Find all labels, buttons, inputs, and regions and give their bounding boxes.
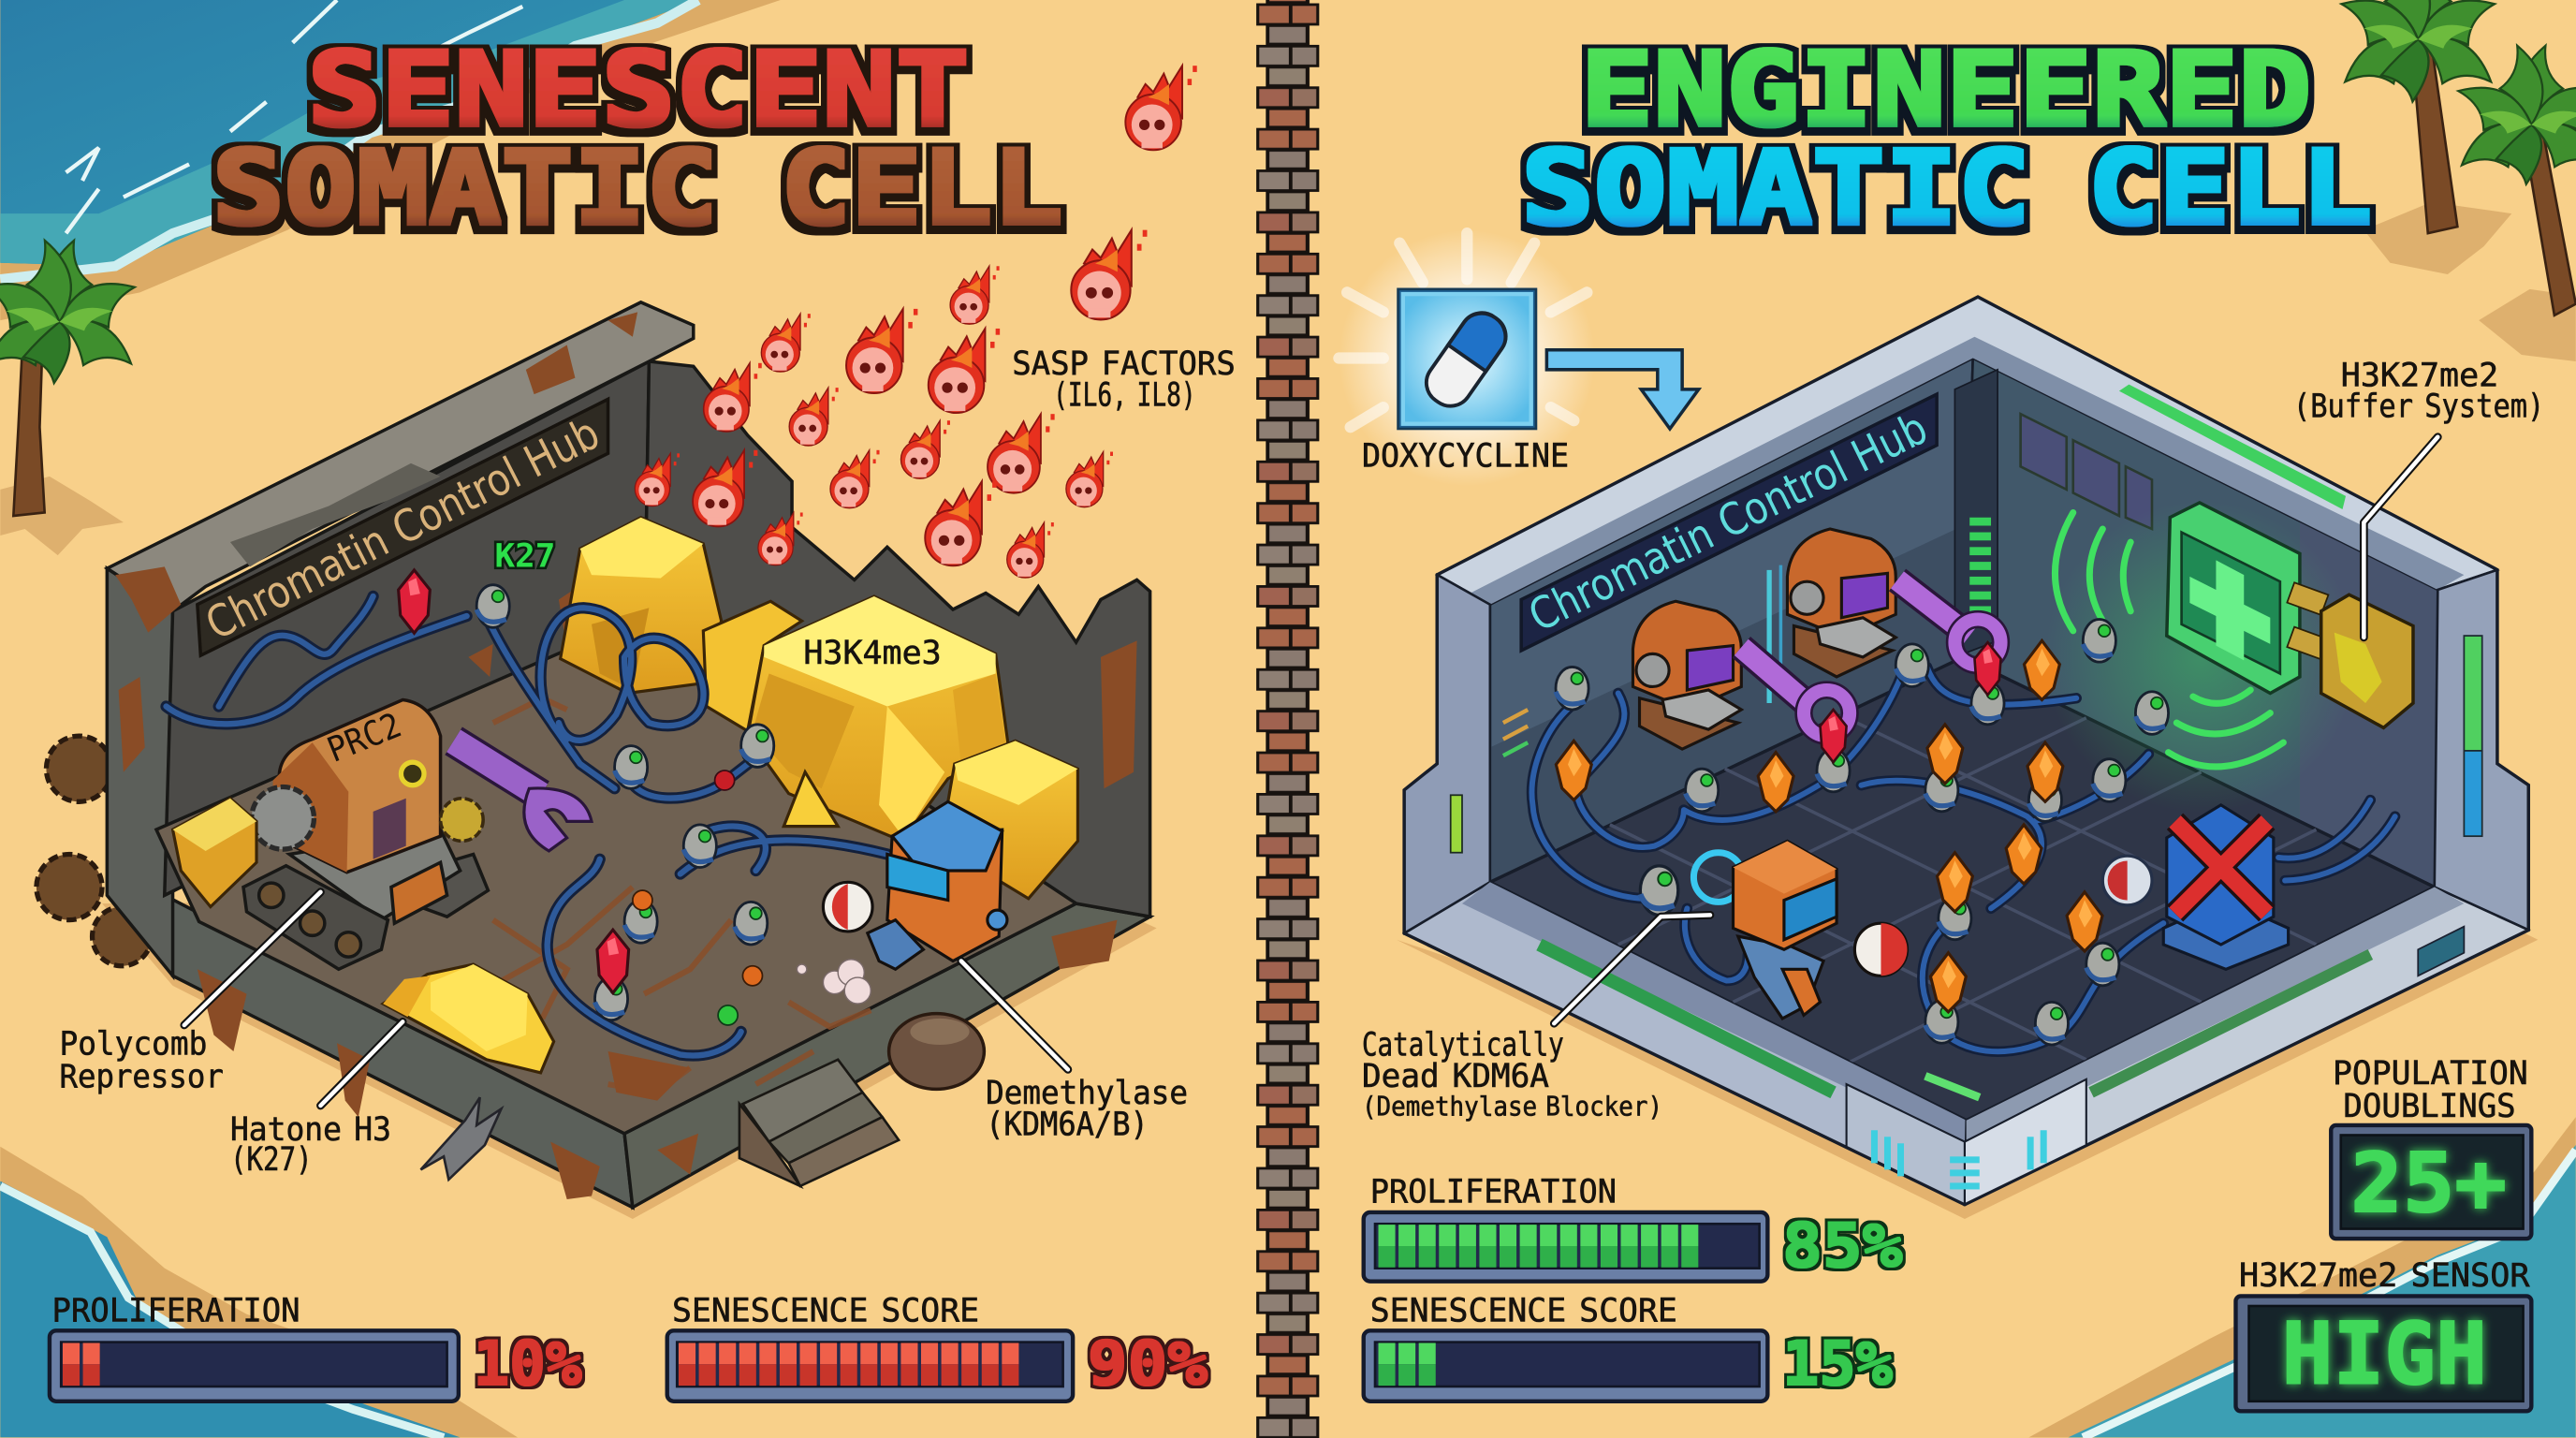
middle gold crystal	[703, 601, 802, 731]
floor	[1490, 657, 2435, 1121]
corner data column	[1954, 370, 1998, 657]
bar	[667, 1330, 1073, 1401]
label: PROLIFERATION	[1370, 1172, 1617, 1211]
doxycycline icon	[1339, 230, 1595, 486]
leader: polycomb	[184, 892, 320, 1025]
palm tree far right	[2451, 42, 2576, 361]
label: catalytically dead KDM6A: Dead KDM6A	[1362, 1057, 1549, 1095]
crawler tracks	[243, 829, 488, 969]
leader: buffer	[2364, 437, 2437, 638]
leader: histone	[320, 1021, 402, 1106]
value: HIGH	[2282, 1303, 2487, 1403]
right pillar	[2435, 570, 2528, 930]
top rim	[1438, 298, 2496, 605]
PRC2 robot	[243, 700, 488, 969]
catalytically dead robot	[1693, 841, 1908, 1019]
cable nodes	[399, 570, 774, 1025]
label: polycomb repressor	[59, 1025, 224, 1096]
lower frame	[1405, 882, 1967, 1204]
H3K4me3 gold crystal	[748, 596, 1009, 841]
label: DOUBLINGS	[2343, 1087, 2516, 1125]
gold gear	[441, 799, 483, 841]
front corner plates	[1847, 1084, 1965, 1204]
label: catalytically dead KDM6A	[1362, 1025, 1662, 1122]
bottom-right ocean	[2028, 1117, 2576, 1437]
orange robot two	[1787, 529, 1895, 677]
purple arms	[1741, 580, 2001, 736]
PRC2 label: PRC2	[322, 705, 407, 770]
arrow from drug to hub	[1546, 350, 1699, 429]
title word: CELL right: CELL	[2088, 129, 2372, 248]
bar	[1364, 1212, 1767, 1282]
population doublings readout	[2331, 1054, 2531, 1239]
label: catalytically dead KDM6A: (Demethylase Blocker)	[1362, 1091, 1662, 1122]
red X mark	[2175, 821, 2267, 914]
title: engineered somatic cell	[1521, 30, 2372, 248]
title: senescent somatic cell	[212, 30, 1063, 248]
title word: CELL: CELL	[781, 129, 1063, 248]
left outer wall side	[107, 568, 173, 976]
label: doxycycline: DOXYCYCLINE	[1362, 436, 1569, 475]
left proliferation meter	[50, 1292, 581, 1401]
label: SENESCENCE SCORE	[672, 1292, 979, 1330]
floor capsule marker	[1925, 1076, 1980, 1097]
crossed-out blue robot	[2102, 805, 2289, 969]
title word: SOMATIC: SOMATIC	[212, 129, 718, 248]
leader: catalytically dead	[1554, 915, 1710, 1023]
palm tree top right	[2333, 0, 2511, 274]
green medical cross panel	[2167, 503, 2300, 693]
screen	[2235, 1296, 2531, 1411]
brick divider wall	[1256, 0, 1319, 1438]
floor	[156, 616, 1076, 1134]
label: PROLIFERATION	[52, 1292, 300, 1330]
label: polycomb repressor: Polycomb	[59, 1025, 207, 1064]
tangled chromatin cables	[167, 596, 887, 1055]
label: K27: K27	[494, 536, 555, 575]
sign: chromatin control hub: Chromatin Control Hub	[1521, 403, 1936, 642]
label: hatone H3: (K27)	[230, 1140, 313, 1179]
label: SENESCENCE SCORE	[1370, 1292, 1677, 1330]
back left wall	[165, 361, 649, 895]
gold padlock: buffer system	[2287, 582, 2413, 727]
label: H3K27me2 buffer system	[2293, 356, 2544, 426]
broken right wall	[644, 361, 1150, 917]
label: H3K4me3: H3K4me3	[803, 634, 942, 672]
robot body	[273, 700, 441, 873]
red gems	[1821, 642, 2001, 762]
bar	[1364, 1330, 1767, 1401]
right stage: engineered chromatin hub	[1397, 298, 2538, 1219]
title line: ENGINEERED: ENGINEERED	[1580, 30, 2311, 149]
steps	[739, 1060, 899, 1186]
screen	[2331, 1125, 2531, 1239]
rust patches	[115, 312, 1137, 1199]
left senescence meter	[667, 1292, 1208, 1401]
wall screens	[2021, 414, 2152, 529]
left yellow block	[173, 799, 256, 907]
bottom gold crystal: histone H3	[383, 964, 554, 1073]
dust puff	[797, 960, 871, 1004]
wall trims	[1503, 565, 1780, 756]
bottom-left ocean	[0, 1147, 518, 1437]
label: SASP factors: SASP FACTORS	[1012, 345, 1236, 383]
label: demethylase: (KDM6A/B)	[986, 1106, 1149, 1144]
title word: SOMATIC right: SOMATIC	[1521, 129, 2030, 248]
right wall	[1963, 359, 2437, 888]
label: polycomb repressor: Repressor	[59, 1058, 224, 1096]
sign: chromatin control hub: Chromatin Control Hub	[198, 408, 607, 651]
broken claw debris	[421, 1097, 501, 1180]
orange gems	[1556, 640, 2102, 1012]
purple wrench	[454, 741, 592, 851]
value: 25+	[2350, 1136, 2507, 1231]
rusty gears	[37, 736, 152, 966]
left pillar	[1405, 575, 1490, 933]
grey gear	[252, 787, 314, 849]
top-left ocean	[0, 0, 781, 320]
label: demethylase: Demethylase	[986, 1074, 1188, 1112]
left wall	[1490, 359, 1973, 882]
glow rays	[1339, 230, 1595, 486]
capsule	[1418, 304, 1515, 415]
label: H3K27me2 SENSOR	[2239, 1256, 2530, 1295]
cables	[1532, 667, 2395, 1051]
label: catalytically dead KDM6A: Catalytically	[1362, 1025, 1564, 1064]
label: hatone H3	[230, 1110, 391, 1179]
leader: demethylase	[961, 961, 1068, 1069]
left stage: ruined chromatin hub	[37, 302, 1157, 1219]
label: H3K27me2 buffer system: H3K27me2	[2341, 356, 2498, 394]
label	[2333, 1054, 2528, 1125]
back gold crystal	[561, 518, 722, 693]
base front faces	[165, 895, 633, 1208]
bar	[50, 1330, 459, 1401]
right senescence meter	[1364, 1292, 1893, 1401]
value: 15%	[1782, 1329, 1893, 1400]
palm tree left	[0, 237, 143, 555]
label: H3K27me2 buffer system: (Buffer System)	[2293, 388, 2544, 426]
H3K27me2 sensor readout	[2235, 1256, 2531, 1411]
value: 10%	[474, 1329, 581, 1400]
rock	[889, 1014, 984, 1089]
demethylase robot	[823, 801, 1007, 969]
green signal arcs	[2045, 501, 2357, 814]
label: demethylase	[986, 1074, 1188, 1144]
hull	[1405, 298, 2528, 1204]
value: 85%	[1782, 1211, 1902, 1282]
circuit panel	[2418, 927, 2464, 976]
cable nodes	[1556, 620, 2169, 1045]
label: SASP factors	[1012, 345, 1236, 414]
label: POPULATION	[2333, 1054, 2528, 1093]
wall top ledge	[107, 302, 694, 611]
right gold crystal	[948, 741, 1077, 899]
title line: SENESCENT: SENESCENT	[307, 30, 970, 149]
orange robot one	[1632, 601, 1741, 749]
label: hatone H3: Hatone H3	[230, 1110, 391, 1149]
right proliferation meter	[1364, 1172, 1902, 1282]
value: 90%	[1088, 1329, 1208, 1400]
SASP factor fireballs	[635, 66, 1197, 578]
label: SASP factors: (IL6, IL8)	[1053, 375, 1196, 414]
